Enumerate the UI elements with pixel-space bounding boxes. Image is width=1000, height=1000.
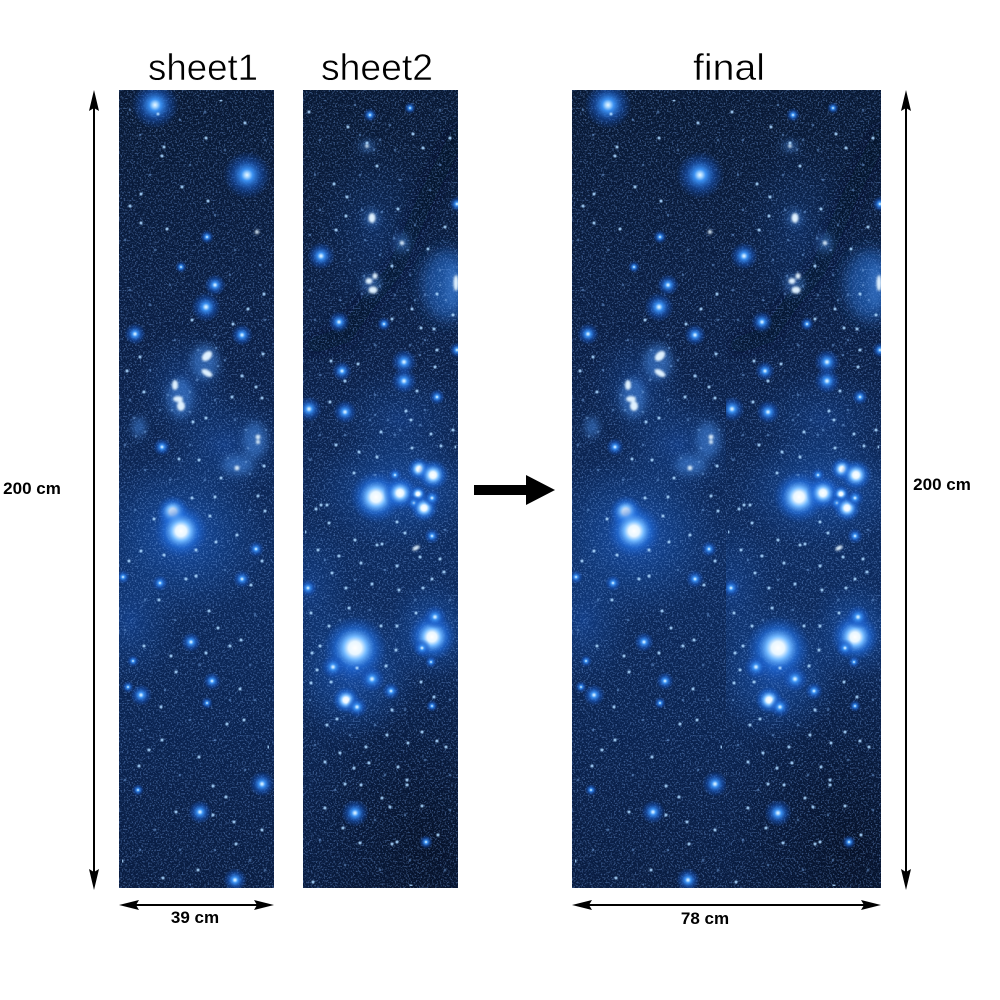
- panel: sheet2 starfield: [303, 90, 458, 888]
- arrow: final width dimension: [572, 900, 881, 910]
- arrow: sheet height dimension: [89, 90, 99, 890]
- panel: final combined starfield: [572, 90, 881, 888]
- arrow: transformation to final: [474, 475, 555, 505]
- arrow: final height dimension: [901, 90, 911, 890]
- heading: sheet2: sheet2: [321, 47, 433, 88]
- arrow: sheet width dimension: [119, 900, 274, 910]
- label: sheet width 39 cm: 39 cm: [171, 908, 219, 927]
- heading: sheet1: sheet1: [148, 47, 258, 88]
- label: final height 200 cm: 200 cm: [913, 475, 971, 494]
- heading: final: final: [693, 47, 765, 88]
- label: final width 78 cm: 78 cm: [681, 909, 729, 928]
- label: sheet height 200 cm: 200 cm: [3, 479, 61, 498]
- panel: sheet1 starfield: [119, 90, 274, 888]
